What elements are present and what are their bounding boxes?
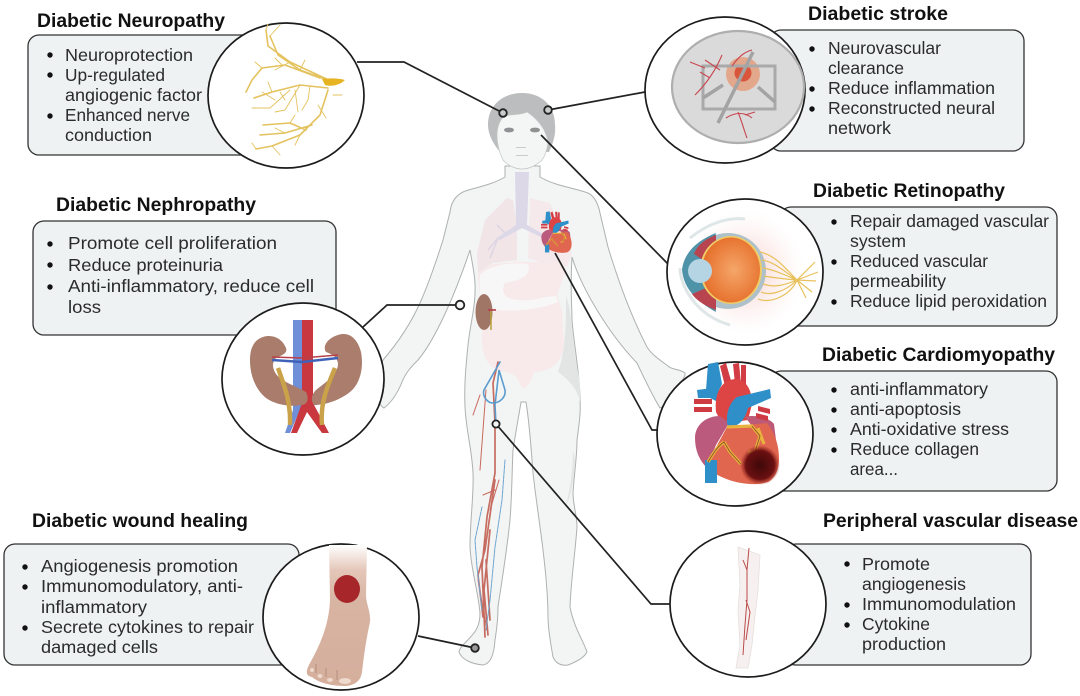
panel: stroke: Reduce inflammation	[828, 78, 995, 98]
panel: wound healing	[4, 544, 299, 665]
panel: cardiomyopathy	[770, 371, 1057, 491]
panel: retinopathy: Reduce lipid peroxidation	[850, 291, 1047, 311]
panel: peripheral vascular disease: angiogenesis	[862, 574, 966, 594]
panel: nephropathy	[33, 221, 336, 335]
heading: Diabetic Neuropathy: Diabetic Neuropathy	[37, 10, 225, 32]
panel: peripheral vascular disease: Cytokine	[862, 614, 930, 634]
icon: leg vessels in circle	[670, 531, 826, 677]
connector: peripheral vascular	[496, 424, 670, 604]
panel: peripheral vascular disease: production	[862, 634, 946, 654]
digestive organs	[478, 262, 566, 388]
panel: neuropathy: angiogenic factor	[65, 85, 202, 105]
panel: wound healing: Secrete cytokines to repair	[41, 617, 254, 637]
small kidney	[476, 294, 496, 330]
body side shading	[558, 296, 580, 505]
icon: kidneys in circle	[222, 303, 384, 455]
face	[497, 112, 548, 169]
panel: neuropathy: Neuroprotection	[65, 45, 193, 65]
panel: wound healing: damaged cells	[41, 637, 158, 657]
heading: Diabetic Cardiomyopathy: Diabetic Cardiomyopathy	[822, 344, 1055, 366]
human body figure	[374, 93, 685, 665]
heading: Diabetic stroke: Diabetic stroke	[808, 3, 948, 25]
panel: wound healing: Immunomodulatory, anti-	[41, 576, 243, 596]
marker dots	[456, 106, 552, 652]
connector: nephropathy	[363, 305, 460, 327]
panel: peripheral vascular disease: Immunomodulation	[862, 594, 1016, 614]
leg blood vessels	[473, 362, 505, 637]
panel: peripheral vascular disease	[785, 544, 1031, 665]
connector: wound	[418, 636, 475, 648]
icon: brain stroke in circle	[645, 17, 805, 163]
connector: neuropathy	[357, 62, 503, 113]
panel: cardiomyopathy: area...	[850, 459, 898, 479]
body outline	[374, 166, 685, 665]
panel: nephropathy: loss	[68, 297, 101, 317]
panel: wound healing: inflammatory	[41, 597, 147, 617]
panel: stroke: clearance	[828, 58, 904, 78]
trachea	[497, 172, 553, 245]
connector lines	[357, 62, 670, 652]
eyes and mouth	[504, 128, 540, 156]
panel: retinopathy: Reduced vascular	[850, 251, 988, 271]
panel: stroke: Reconstructed neural	[828, 98, 995, 118]
connector: cardiomyopathy	[555, 253, 660, 430]
icon: foot with wound in circle	[263, 544, 419, 690]
panel: neuropathy: conduction	[65, 125, 152, 145]
icon: neuron in circle	[208, 23, 364, 168]
panel: peripheral vascular disease: Promote	[862, 554, 930, 574]
panel: retinopathy: system	[850, 231, 906, 251]
panel: nephropathy: Promote cell proliferation	[68, 233, 277, 253]
heading: Diabetic Nephropathy: Diabetic Nephropathy	[56, 194, 256, 216]
panel: retinopathy	[780, 207, 1057, 326]
panel: nephropathy: Reduce proteinuria	[68, 255, 223, 275]
heading: Diabetic wound healing: Diabetic wound healing	[32, 510, 248, 532]
icon: heart in circle	[657, 362, 813, 506]
heading: Peripheral vascular disease: Peripheral vascular disease	[823, 510, 1078, 532]
panel: retinopathy: Repair damaged vascular	[850, 211, 1049, 231]
small heart	[541, 211, 572, 253]
panel: stroke: Neurovascular	[828, 38, 941, 58]
panel: cardiomyopathy: Anti-oxidative stress	[850, 419, 1009, 439]
hair back	[488, 93, 555, 152]
panel: neuropathy: Up-regulated	[65, 65, 165, 85]
panel: wound healing: Angiogenesis promotion	[41, 556, 238, 576]
panel: stroke	[770, 30, 1024, 151]
connector: stroke	[548, 92, 645, 110]
panel: cardiomyopathy: anti-apoptosis	[850, 399, 961, 419]
heading: Diabetic Retinopathy: Diabetic Retinopathy	[813, 180, 1005, 202]
panel: nephropathy: Anti-inflammatory, reduce cell	[68, 276, 314, 296]
panel: neuropathy	[28, 35, 253, 155]
icon: eye in circle	[667, 199, 823, 345]
connector: retinopathy	[541, 135, 668, 264]
lungs	[477, 198, 517, 273]
panel: retinopathy: permeability	[850, 271, 946, 291]
panel: neuropathy: Enhanced nerve	[65, 105, 190, 125]
panel: cardiomyopathy: Reduce collagen	[850, 439, 979, 459]
panel: cardiomyopathy: anti-inflammatory	[850, 379, 988, 399]
panel: stroke: network	[828, 118, 891, 138]
